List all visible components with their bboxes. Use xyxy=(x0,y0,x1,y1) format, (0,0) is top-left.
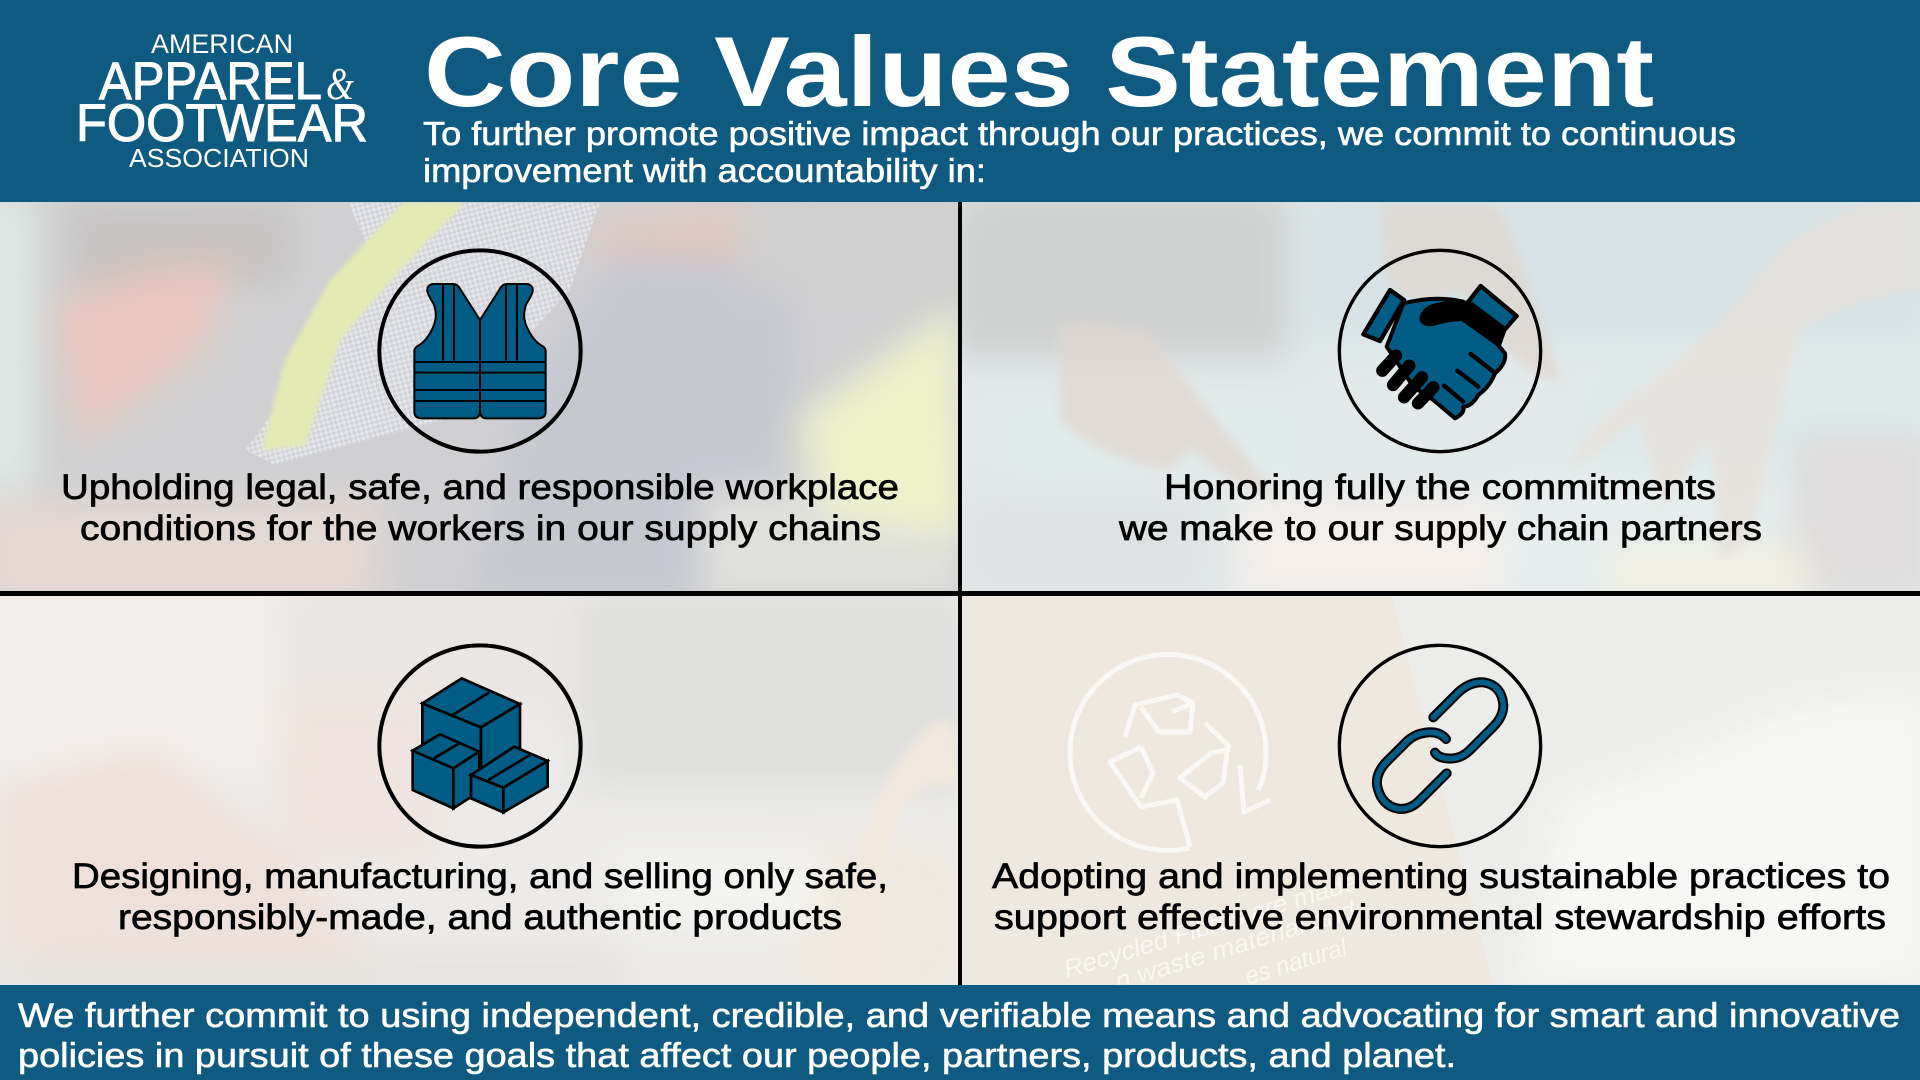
panel: authentic products xyxy=(0,590,970,1000)
logo: American Apparel & Footwear Association: AMERICAN xyxy=(151,29,293,59)
photo background: workers in safety vests xyxy=(0,190,970,610)
icon: handshake xyxy=(1339,250,1541,452)
photo background: sewing machine xyxy=(0,590,970,1000)
icon: stacked boxes xyxy=(379,645,581,847)
recycled paper printed text: Recycled Fibres are made xyxy=(1061,868,1360,984)
panel: environmental stewardship xyxy=(962,596,1920,996)
panel: supply chain partners xyxy=(950,190,1920,600)
title: Core Values Statement xyxy=(424,16,1654,127)
text: workplace commitment xyxy=(61,468,899,548)
footer band xyxy=(0,985,1920,1080)
header band xyxy=(0,0,1920,202)
text: partner commitment: we make to our supply chain partners xyxy=(1118,509,1762,548)
recycled paper recycling symbol xyxy=(1070,655,1270,851)
text: sustainability commitment xyxy=(992,857,1890,937)
footer statement: We further commit to using independent, credible, and verifiable means and advocating for smart and innovative xyxy=(18,997,1900,1035)
text: sustainability commitment: Adopting and implementing sustainable practices to xyxy=(992,857,1890,896)
photo background: hands over glowing table xyxy=(950,190,1920,600)
logo: American Apparel & Footwear Association: ASSOCIATION xyxy=(129,143,309,173)
photo background: recycled paper and white fabric xyxy=(962,596,1920,996)
panel: workplace conditions xyxy=(0,190,970,610)
text: sustainability commitment: support effective environmental stewardship efforts xyxy=(994,898,1886,937)
text: workplace commitment: conditions for the workers in our supply chains xyxy=(80,509,881,548)
logo: American Apparel & Footwear Association: APPAREL xyxy=(99,52,322,111)
text: product commitment: responsibly-made, and authentic products xyxy=(118,898,842,937)
icon: chain link xyxy=(1339,645,1541,847)
text: product commitment xyxy=(72,857,888,937)
icon: safety vest xyxy=(379,250,581,452)
footer statement: policies in pursuit of these goals that affect our people, partners, products, and planet. xyxy=(18,1037,1456,1075)
text: product commitment: Designing, manufacturing, and selling only safe, xyxy=(72,857,888,896)
subtitle: improvement with accountability in: xyxy=(423,152,986,189)
logo: American Apparel & Footwear Association: & xyxy=(326,58,354,109)
panel dividers xyxy=(0,202,1920,985)
text: partner commitment: Honoring fully the commitments xyxy=(1164,468,1716,507)
recycled paper printed text: es natural xyxy=(1242,933,1351,991)
subtitle: To further promote positive impact through our practices, we commit to continuous xyxy=(423,115,1736,152)
footer statement xyxy=(18,997,1900,1075)
logo: American Apparel & Footwear Association xyxy=(76,29,368,173)
logo: American Apparel & Footwear Association: FOOTWEAR xyxy=(76,94,368,153)
text: workplace commitment: Upholding legal, safe, and responsible workplace xyxy=(61,468,899,507)
recycled paper printed text: n waste material and xyxy=(1112,896,1360,996)
subtitle xyxy=(423,115,1736,189)
text: partner commitment xyxy=(1118,468,1762,548)
